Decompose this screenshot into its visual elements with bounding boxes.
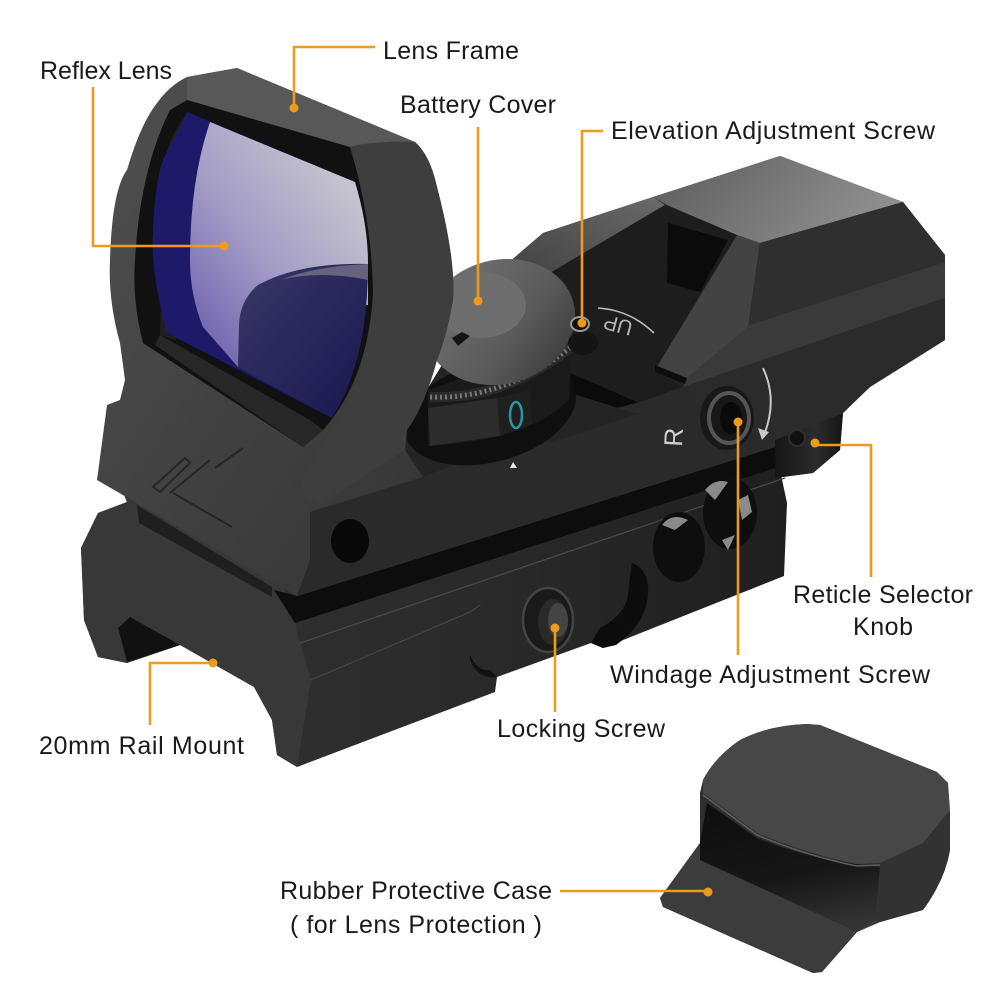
callout: 20mm Rail Mount [39,658,244,760]
callout: Rubber Protective Case: Rubber Protective Case [280,877,552,905]
callout: Rubber Protective Case: ( for Lens Protection ) [290,911,542,939]
callout: Battery Cover [400,91,556,306]
callout: Windage Adjustment Screw: Windage Adjustment Screw [610,661,931,689]
icon: rubber protective case [660,724,950,973]
callout: Reflex Lens [40,57,228,250]
rear housing [297,156,945,596]
callout: Reflex Lens: Reflex Lens [40,57,172,85]
elevation screw: UP [601,310,635,339]
main body front [297,387,775,596]
callout: Lens Frame: Lens Frame [383,37,519,65]
mount base [81,447,787,767]
windage screw: R [658,427,689,447]
callout: Reticle Selector Knob [793,438,973,641]
locking screw [523,588,573,652]
elevation screw [568,308,654,355]
callout: Locking Screw: Locking Screw [497,715,666,743]
adjustment dial [392,242,589,483]
callout: Battery Cover: Battery Cover [400,91,556,119]
reflex lens [153,112,368,418]
engraved logo mark [153,448,243,527]
callout: Elevation Adjustment Screw: Elevation Adjustment Screw [611,117,936,145]
callout: Elevation Adjustment Screw [578,117,936,328]
callout: Rubber Protective Case [280,877,712,939]
callout: Reticle Selector Knob: Knob [853,613,913,641]
windage screw [658,368,771,450]
callout: 20mm Rail Mount: 20mm Rail Mount [39,732,244,760]
callout: Locking Screw [497,624,666,743]
callout: Reticle Selector Knob: Reticle Selector [793,581,973,609]
callout: Lens Frame [290,37,519,112]
callout: Windage Adjustment Screw [610,418,931,689]
lens frame [97,68,453,596]
mounting screw heads [653,477,757,582]
icon: reflex sight illustration [81,68,945,767]
